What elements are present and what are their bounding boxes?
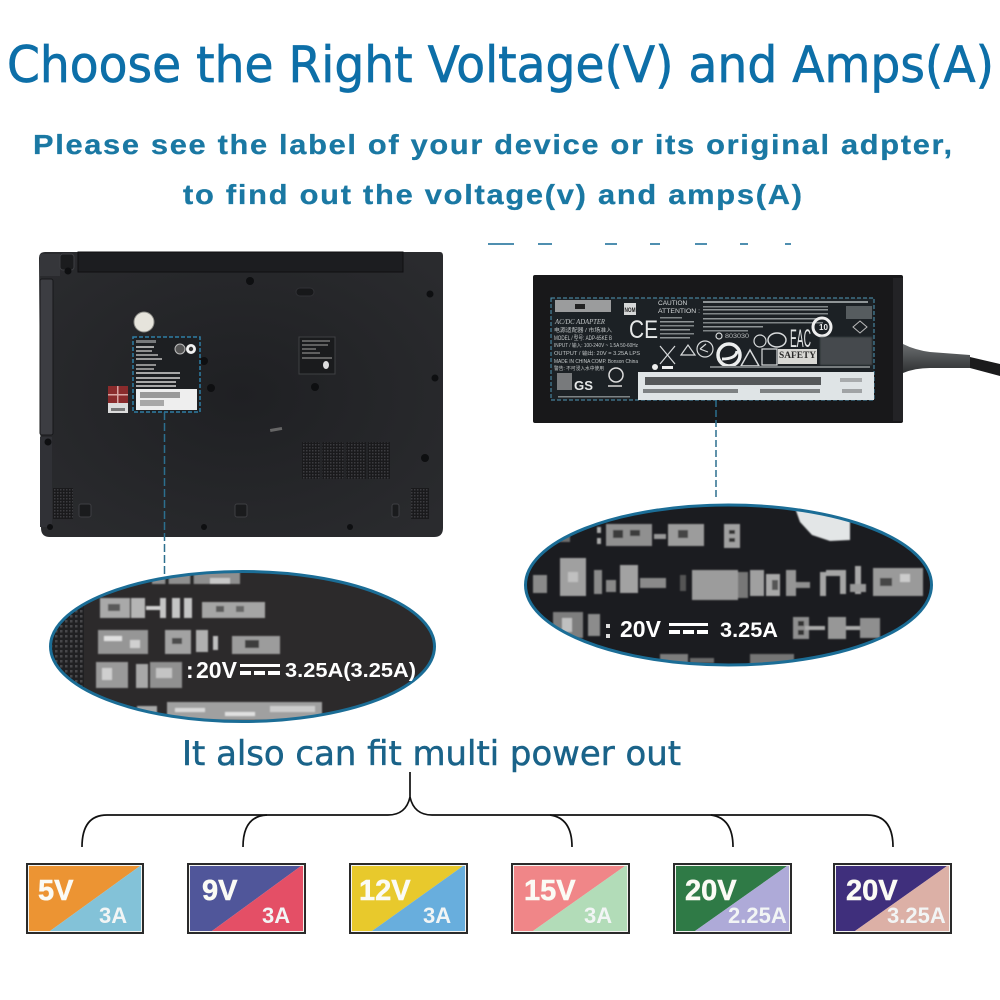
badge: 15V 3A: [512, 864, 629, 933]
heading: multi power out: It also can fit multi power out: [182, 734, 681, 774]
speaker grille right: [411, 488, 429, 519]
adapter cable: [903, 344, 1000, 376]
adapter rating label: MADE IN CHINA COMP. Bonson China: [554, 359, 638, 365]
laptop label: [133, 337, 200, 412]
adapter rating label: [551, 298, 874, 400]
adapter rating label: EAC: [790, 325, 811, 353]
latch: [296, 288, 314, 296]
battery bay: [78, 252, 403, 272]
badge: 15V 3A: 3A: [584, 903, 612, 928]
speaker grille left: [53, 488, 73, 519]
side strip: [40, 279, 53, 435]
badge: 20V 3.25A: [834, 864, 951, 933]
adapter rating label: 电源适配器 / 市场准入: [554, 326, 613, 334]
badge: 12V 3A: 12V: [359, 875, 411, 907]
dashed leader: adapter: [715, 400, 717, 499]
reading: 20V 3.25A: 3.25A(3.25A): [285, 660, 416, 682]
barcode sticker: [638, 372, 874, 400]
badge: 20V 3.25A: 20V: [846, 875, 898, 907]
adapter rating label: CE: [629, 316, 658, 344]
reading: 20V 3.25A: [606, 616, 778, 642]
adapter rating label: GS: [574, 378, 593, 393]
badge: 9V 3A: 3A: [262, 903, 290, 928]
vent grille: [302, 442, 390, 479]
dashed leader: laptop: [164, 412, 166, 575]
adapter rating label: OUTPUT / 输出: 20V = 3.25A LPS: [554, 350, 641, 357]
reading: 20V 3.25A: 20V: [196, 657, 238, 683]
badge: 5V 3A: 5V: [38, 875, 74, 907]
adapter rating label: 803030: [725, 334, 750, 340]
reading: 20V 3.25A: 20V: [620, 616, 662, 642]
adapter rating label: ATTENTION :: [658, 308, 700, 315]
badge: 20V 2.25A: [674, 864, 791, 933]
power adapter photo: [533, 275, 903, 423]
badge: 20V 3.25A: 3.25A: [887, 903, 946, 928]
regulatory sticker: [299, 337, 335, 374]
adapter rating label: INPUT / 输入: 100-240V ~ 1.5A 50-60Hz: [554, 342, 638, 349]
badge: 9V 3A: [188, 864, 305, 933]
pixelated label text: [96, 572, 322, 720]
reading: 20V 3.25A: 3.25A: [720, 619, 778, 642]
adapter rating label: AC/DC ADAPTER: [554, 317, 605, 326]
cropped text remnants: [488, 243, 791, 245]
badge: 5V 3A: [27, 864, 143, 933]
rubber feet: [79, 504, 399, 517]
textured edge: [52, 606, 84, 687]
bracket connector: [82, 772, 893, 847]
magnifier: adapter label: [526, 505, 932, 666]
adapter rating label: 警告: 不可浸入水中使用: [554, 365, 604, 372]
adapter rating label: NOM: [624, 308, 636, 314]
subtitle line 1: Please see the label of your device or its original adpter,: [33, 129, 952, 161]
adapter rating label: 10: [819, 323, 828, 332]
magnifier: laptop label: [48, 565, 434, 725]
pixelated adapter text: [533, 508, 923, 666]
badge: 20V 2.25A: 2.25A: [728, 903, 787, 928]
windows sticker: [108, 386, 128, 413]
subtitle line 2: to find out the voltage(v) and amps(A): [183, 179, 802, 211]
laptop underside photo: [39, 252, 443, 537]
adapter rating label: SAFETY: [779, 350, 817, 360]
adapter rating label: CAUTION: [658, 300, 688, 307]
laptop body: [39, 252, 443, 537]
badge: 12V 3A: [350, 864, 467, 933]
badge: 9V 3A: 9V: [202, 875, 238, 907]
adapter rating label: MODEL / 型号: ADP-65KE B: [554, 334, 612, 342]
white round seal: [134, 312, 154, 332]
screws: [44, 268, 438, 530]
badge: 12V 3A: 3A: [423, 903, 451, 928]
badge: 15V 3A: 15V: [524, 875, 576, 907]
reading: 20V 3.25A: [186, 657, 416, 683]
badge: 20V 2.25A: 20V: [685, 875, 737, 907]
reading: 20V 3.25A: :: [186, 657, 194, 683]
badge: 5V 3A: 3A: [99, 903, 127, 928]
